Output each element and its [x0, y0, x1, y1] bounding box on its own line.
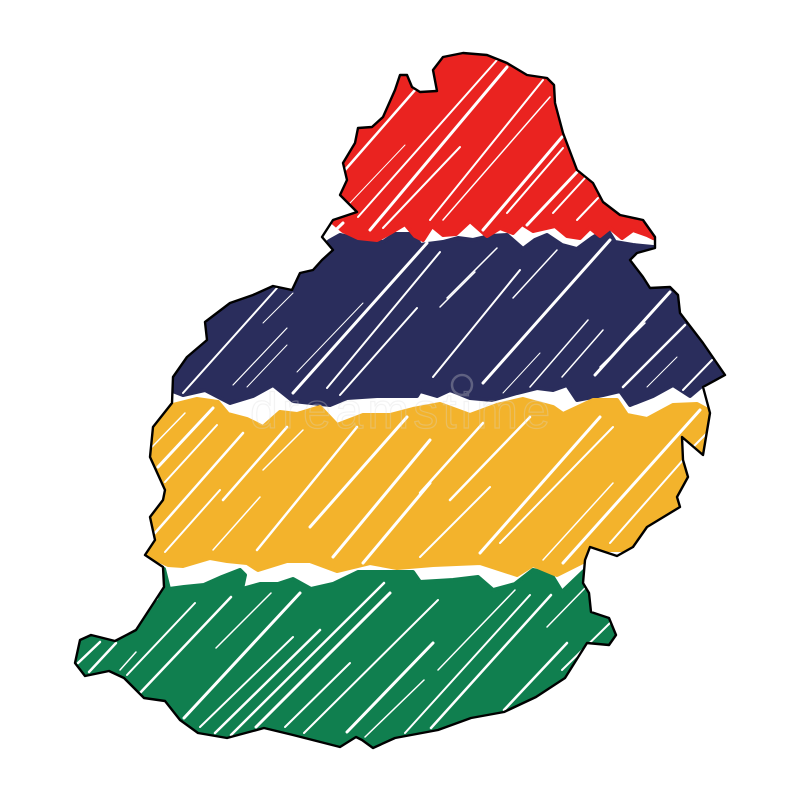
- band: green: [76, 567, 615, 747]
- watermark: text: dreamstime: [250, 383, 550, 439]
- scribble: green band: [78, 583, 611, 737]
- band: navy: [160, 229, 740, 405]
- band: yellow: [135, 399, 720, 575]
- watermark: logo ring: [452, 375, 472, 395]
- white scribble gaps: [78, 60, 712, 737]
- watermark: [250, 375, 550, 439]
- flag colour bands: [76, 54, 724, 747]
- band: red: [332, 54, 654, 242]
- scribble: navy band: [183, 240, 712, 395]
- map of Mauritius with scribbled flag colours: [74, 52, 726, 750]
- scribble: red band: [322, 60, 598, 243]
- scribble: yellow band: [152, 408, 707, 563]
- island outline: [75, 53, 725, 748]
